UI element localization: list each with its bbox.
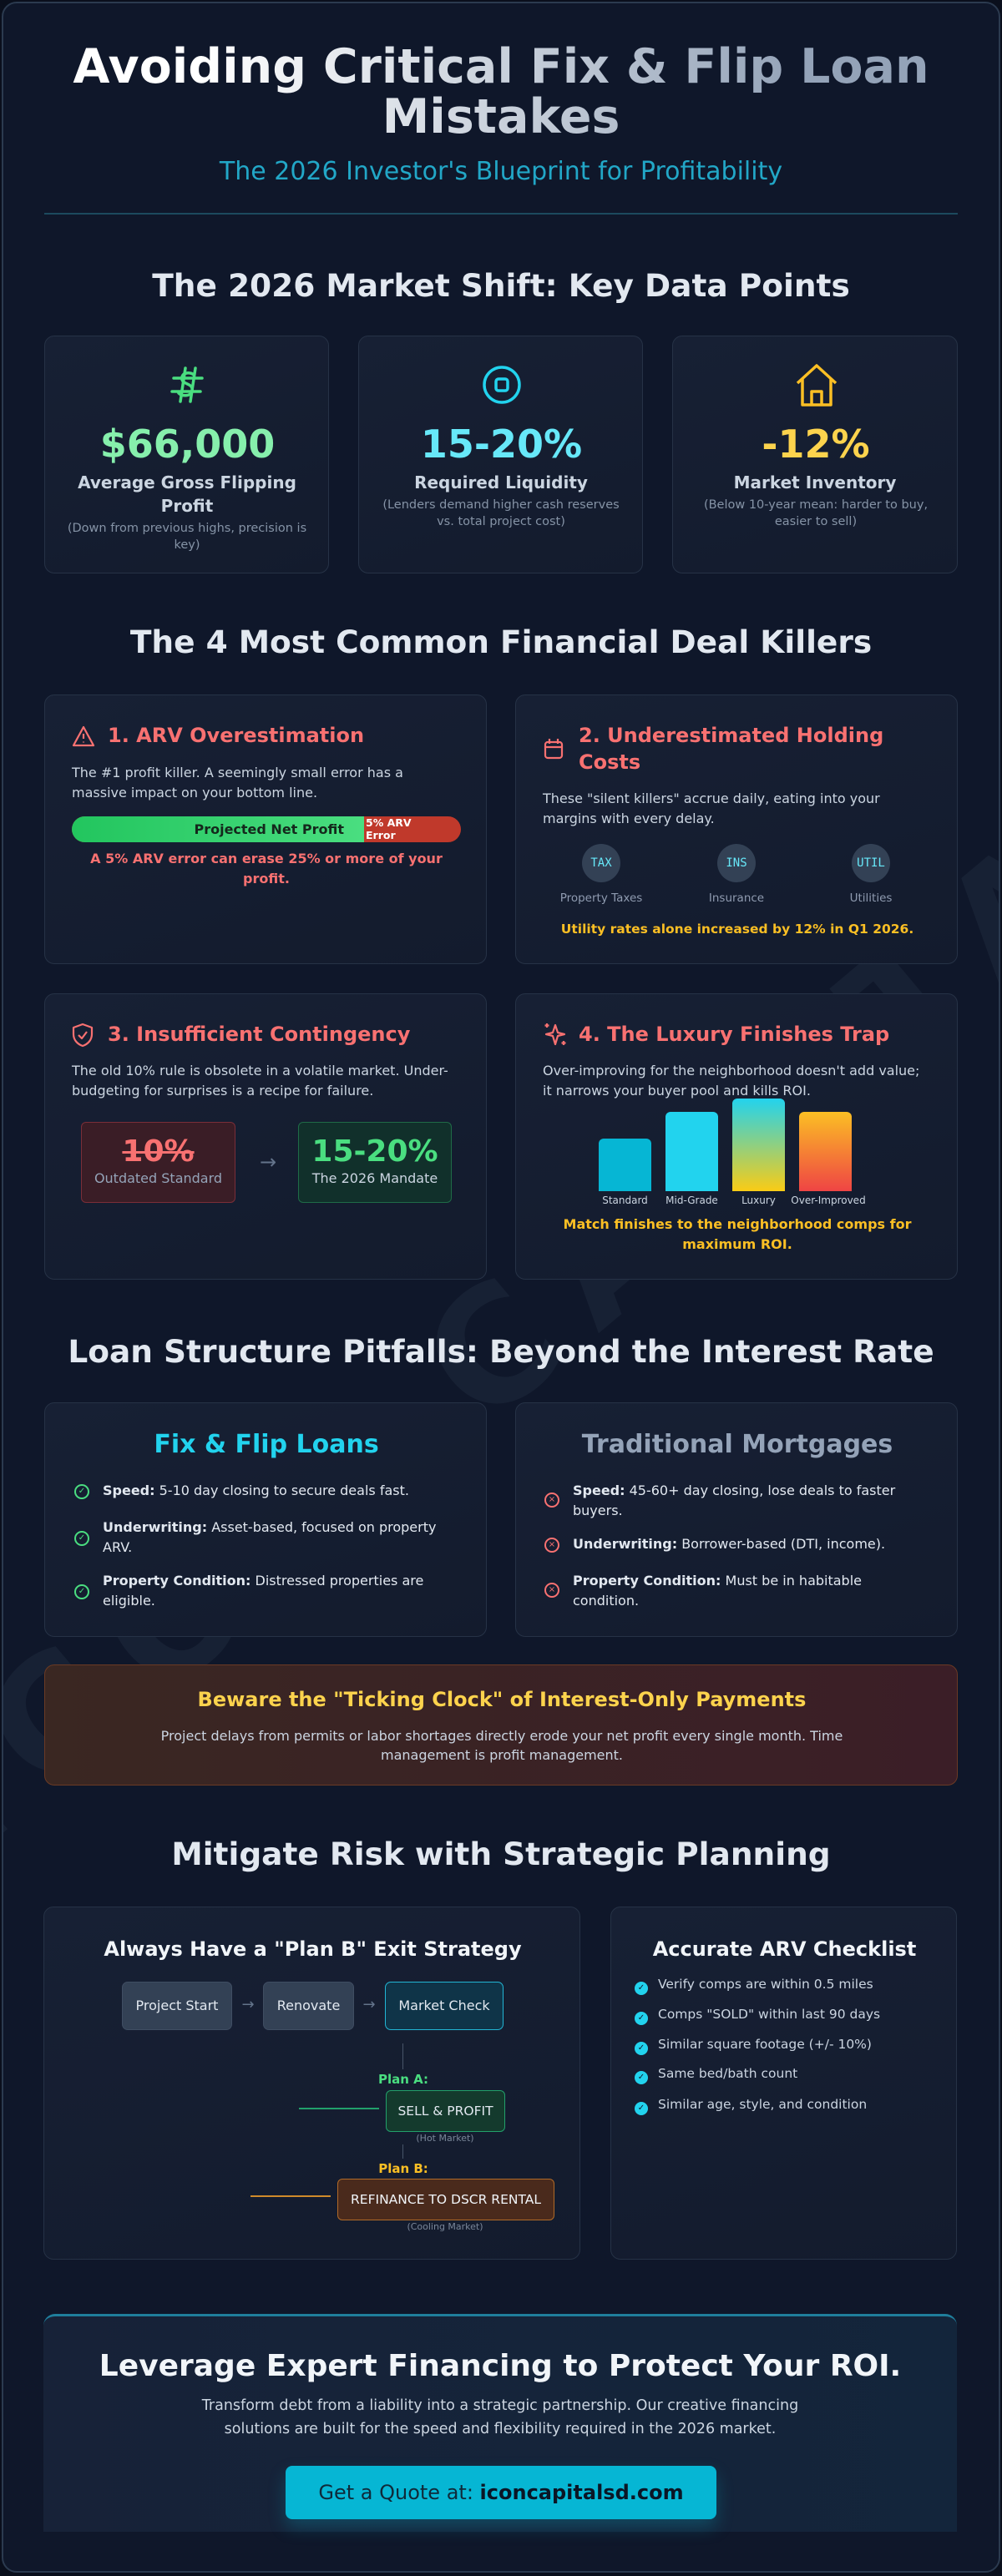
profit bar: Error	[366, 829, 396, 841]
checklist items: Verify comps are within 0.5 miles	[658, 1977, 873, 1992]
panel: fix & flip loans: Underwriting: Asset-based, focused on property ARV.	[103, 1519, 436, 1555]
panel: plan B exit strategy: →	[362, 1996, 376, 2013]
heading: mitigate risk: Mitigate Risk with Strategic Planning	[171, 1836, 831, 1872]
checklist items: Similar age, style, and condition	[658, 2097, 867, 2112]
checklist items: Same bed/bath count	[658, 2066, 797, 2081]
panel: holding costs: Utility rates alone increased by 12% in Q1 2026.	[561, 922, 913, 937]
panel: holding costs: Property Taxes	[560, 891, 642, 905]
checklist items	[635, 1977, 880, 2115]
panel: holding costs: UTIL	[857, 856, 885, 870]
bar chart: Standard	[602, 1195, 648, 1206]
stat card: inventory: -12%	[762, 422, 870, 467]
callout: ticking clock	[44, 1664, 958, 1786]
title: Mistakes	[382, 89, 620, 144]
panel: luxury trap: Over-improving for the neighborhood doesn't add value; it narrows your buyer pool and kills ROI.	[543, 1063, 919, 1099]
title	[0, 42, 1002, 142]
title: Avoiding Critical Fix & Flip Loan	[73, 39, 929, 94]
panel: plan B exit strategy: →	[241, 1996, 255, 2013]
bar chart: Over-Improved	[791, 1195, 866, 1206]
panel: traditional mortgages: Underwriting: Borrower-based (DTI, income).	[573, 1536, 885, 1552]
checklist items: ✓	[638, 2104, 645, 2113]
stat card: profit: (Down from previous highs, precision is key)	[68, 522, 306, 552]
heading: loan structure: Loan Structure Pitfalls: Beyond the Interest Rate	[68, 1333, 934, 1370]
panel: ARV checklist	[610, 1907, 957, 2260]
panel: contingency: 3. Insufficient Contingency	[108, 1023, 410, 1046]
panel: plan B exit strategy: Renovate	[277, 1998, 340, 2013]
arrow: →	[260, 1150, 276, 1174]
panel: plan B exit strategy: (Cooling Market)	[407, 2221, 483, 2232]
CTA panel: Leverage Expert Financing to Protect Your ROI.	[99, 2349, 901, 2383]
callout: ticking clock: Beware the "Ticking Clock" of Interest-Only Payments	[198, 1688, 806, 1711]
new mandate box: 15-20%	[311, 1134, 438, 1169]
profit bar: 5% ARV	[366, 816, 412, 829]
panel: fix & flip loans	[44, 1402, 487, 1637]
stat card: liquidity	[358, 336, 643, 573]
flow chart	[122, 1982, 232, 2030]
panel: fix & flip loans: ✓	[78, 1533, 85, 1543]
panel: ARV overestimation: A 5% ARV error can erase 25% or more of your profit.	[90, 851, 443, 886]
checklist items: ✓	[638, 1983, 645, 1993]
panel: plan B exit strategy: SELL & PROFIT	[397, 2104, 493, 2119]
callout: ticking clock: Project delays from permits or labor shortages directly erode your net profit every single month. Time management is profit management.	[161, 1728, 843, 1763]
panel: plan B exit strategy: Plan A:	[378, 2072, 428, 2087]
panel: traditional mortgages	[515, 1402, 958, 1637]
profit bar	[72, 816, 461, 842]
stat card: liquidity: (Lenders demand higher cash reserves vs. total project cost)	[382, 498, 620, 528]
subtitle: The 2026 Investor's Blueprint for Profitability	[220, 157, 782, 186]
new mandate box: The 2026 Mandate	[312, 1170, 438, 1186]
panel: ARV checklist: Accurate ARV Checklist	[653, 1937, 916, 1961]
heading: market shift: The 2026 Market Shift: Key Data Points	[152, 267, 850, 304]
cost icons: TAX	[590, 856, 612, 870]
icon: house	[797, 364, 837, 407]
icon: warning	[72, 726, 95, 746]
bar chart: Luxury	[741, 1195, 776, 1206]
panel: plan B exit strategy: Always Have a "Plan B" Exit Strategy	[104, 1937, 522, 1961]
check items: ✓	[78, 1487, 85, 1496]
bar chart	[599, 1099, 866, 1206]
panel: plan B exit strategy: REFINANCE TO DSCR RENTAL	[351, 2192, 541, 2207]
old standard box: 10%	[122, 1134, 195, 1169]
new mandate box	[298, 1122, 452, 1203]
profit bar: Projected Net Profit	[194, 821, 344, 837]
bar chart: Mid-Grade	[665, 1195, 718, 1206]
CTA panel	[43, 2314, 957, 2532]
panel: luxury trap	[515, 993, 958, 1280]
panel: plan B exit strategy	[43, 1907, 580, 2260]
panel: luxury trap: 4. The Luxury Finishes Trap	[579, 1023, 889, 1046]
stat card: profit: Average Gross Flipping Profit	[78, 472, 296, 516]
flow chart: Project Start	[136, 1998, 218, 2013]
cost icons	[582, 844, 620, 882]
icon: shield	[72, 1023, 94, 1047]
x items: Speed: 45-60+ day closing, lose deals to faster buyers.	[573, 1482, 895, 1518]
panel: plan B exit strategy: (Hot Market)	[416, 2133, 474, 2144]
stat card: liquidity: Required Liquidity	[414, 472, 588, 492]
old standard box: Outdated Standard	[94, 1170, 222, 1186]
panel: holding costs: Utilities	[850, 891, 892, 905]
panel: traditional mortgages: ×	[549, 1540, 555, 1549]
panel: traditional mortgages: ×	[549, 1585, 555, 1594]
panel: ARV overestimation	[44, 695, 487, 964]
panel: contingency	[44, 993, 487, 1280]
stat card: inventory	[672, 336, 958, 573]
stat card: profit: $66,000	[100, 422, 275, 467]
panel: luxury trap: Match finishes to the neighborhood comps for maximum ROI.	[564, 1216, 911, 1252]
panel: holding costs	[515, 695, 958, 964]
panel: traditional mortgages: Property Condition: Must be in habitable condition.	[573, 1573, 862, 1609]
checklist items: Similar square footage (+/- 10%)	[658, 2037, 872, 2052]
panel: fix & flip loans: ✓	[78, 1587, 85, 1596]
panel: traditional mortgages: Traditional Mortgages	[582, 1430, 893, 1459]
icon: sparkle	[544, 1023, 566, 1045]
button	[286, 2466, 716, 2519]
checklist items: Comps "SOLD" within last 90 days	[658, 2007, 880, 2022]
panel: plan B exit strategy: Market Check	[398, 1998, 490, 2013]
checklist items: ✓	[638, 2073, 645, 2082]
stat card: profit	[44, 336, 329, 573]
panel: holding costs: Insurance	[709, 891, 764, 905]
panel: fix & flip loans: Fix & Flip Loans	[154, 1430, 379, 1459]
panel: plan B exit strategy: Plan B:	[378, 2161, 428, 2176]
panel: holding costs: 2. Underestimated Holding Costs	[579, 724, 883, 774]
old standard box	[81, 1122, 235, 1203]
stat card: inventory: (Below 10-year mean: harder to buy, easier to sell)	[704, 498, 928, 528]
panel: ARV overestimation: 1. ARV Overestimation	[108, 724, 364, 747]
panel: contingency: The old 10% rule is obsolete in a volatile market. Under-budgeting for surprises is a recipe for failure.	[72, 1063, 448, 1099]
icon: target	[483, 366, 521, 404]
stat card: liquidity: 15-20%	[421, 422, 582, 467]
CTA panel: Transform debt from a liability into a strategic partnership. Our creative financing solutions are built for the speed and flexibility required in the 2026 market.	[202, 2397, 798, 2437]
stat card: inventory: Market Inventory	[734, 472, 896, 492]
panel: fix & flip loans: Property Condition: Distressed properties are eligible.	[103, 1573, 423, 1609]
checklist items: ✓	[638, 2013, 645, 2023]
icon: dollar	[170, 366, 204, 403]
checklist items: ✓	[638, 2043, 645, 2053]
x items: ×	[549, 1495, 555, 1504]
button: Get a Quote at: iconcapitalsd.com	[318, 2481, 684, 2504]
panel: holding costs: INS	[726, 856, 747, 870]
check items: Speed: 5-10 day closing to secure deals fast.	[103, 1482, 409, 1498]
icon: calendar	[544, 739, 563, 760]
heading: deal killers: The 4 Most Common Financial Deal Killers	[130, 624, 872, 660]
panel: ARV overestimation: The #1 profit killer. A seemingly small error has a massive impact on your bottom line.	[72, 765, 403, 801]
panel: holding costs: These "silent killers" accrue daily, eating into your margins with every delay.	[543, 790, 880, 826]
